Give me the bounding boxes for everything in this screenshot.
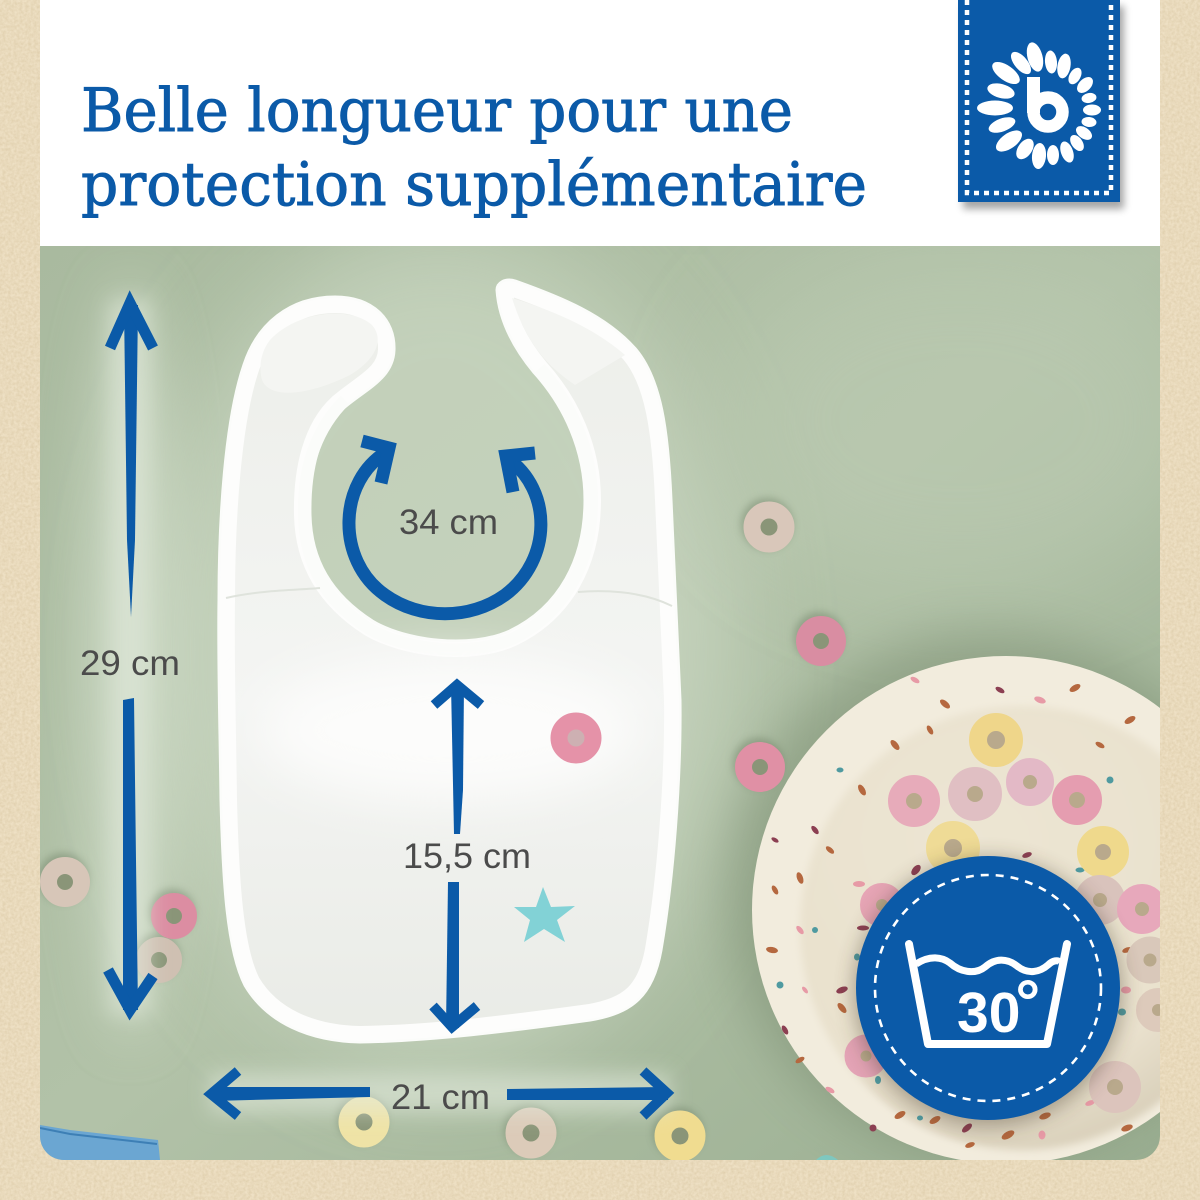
- bib terry fabric: [220, 281, 679, 1041]
- title: protection supplémentaire: [81, 150, 867, 220]
- bib velcro strap: [512, 298, 625, 385]
- wash temperature badge: [854, 856, 1122, 1126]
- green backdrop: [40, 230, 1200, 1160]
- turquoise dish hint: [816, 1155, 838, 1160]
- bib neck binding: [304, 368, 592, 649]
- bib: [220, 281, 679, 1041]
- dimension label: 15,5 cm: 15,5 cm: [403, 837, 531, 876]
- dimension label: 21 cm: 21 cm: [391, 1078, 490, 1117]
- cereal rings on table and plate: [47, 507, 1172, 1153]
- bib lower whitening: [260, 660, 640, 800]
- brand logo tag: [958, 0, 1124, 209]
- photo panel: [40, 230, 1200, 1164]
- icon: water wave: [916, 958, 1060, 972]
- arrow: 21 cm width: [211, 1071, 668, 1116]
- arrow: 15,5 cm length: [433, 685, 481, 1028]
- arrow: 34 cm neck: [349, 441, 541, 614]
- icon: wash tub: [909, 944, 1067, 1044]
- pink ring on bib: [559, 721, 593, 755]
- bib binding band: [220, 281, 679, 1041]
- temperature: 30: [957, 981, 1020, 1045]
- arrow: 29 cm height: [108, 303, 153, 1010]
- embroidered star: [514, 887, 575, 942]
- header panel: [40, 0, 1160, 246]
- plate: [728, 633, 1200, 1164]
- plate sprinkles: [766, 675, 1137, 1149]
- arrow glow: [130, 300, 670, 1093]
- dimension label: 34 cm: 34 cm: [399, 503, 498, 542]
- temperature: °: [1015, 968, 1040, 1037]
- title: Belle longueur pour une: [81, 76, 793, 146]
- cloth corner: [40, 1125, 160, 1160]
- dimension label: 29 cm: 29 cm: [80, 644, 180, 683]
- bib lobe velcro: [260, 314, 378, 393]
- bib side band: [226, 588, 672, 606]
